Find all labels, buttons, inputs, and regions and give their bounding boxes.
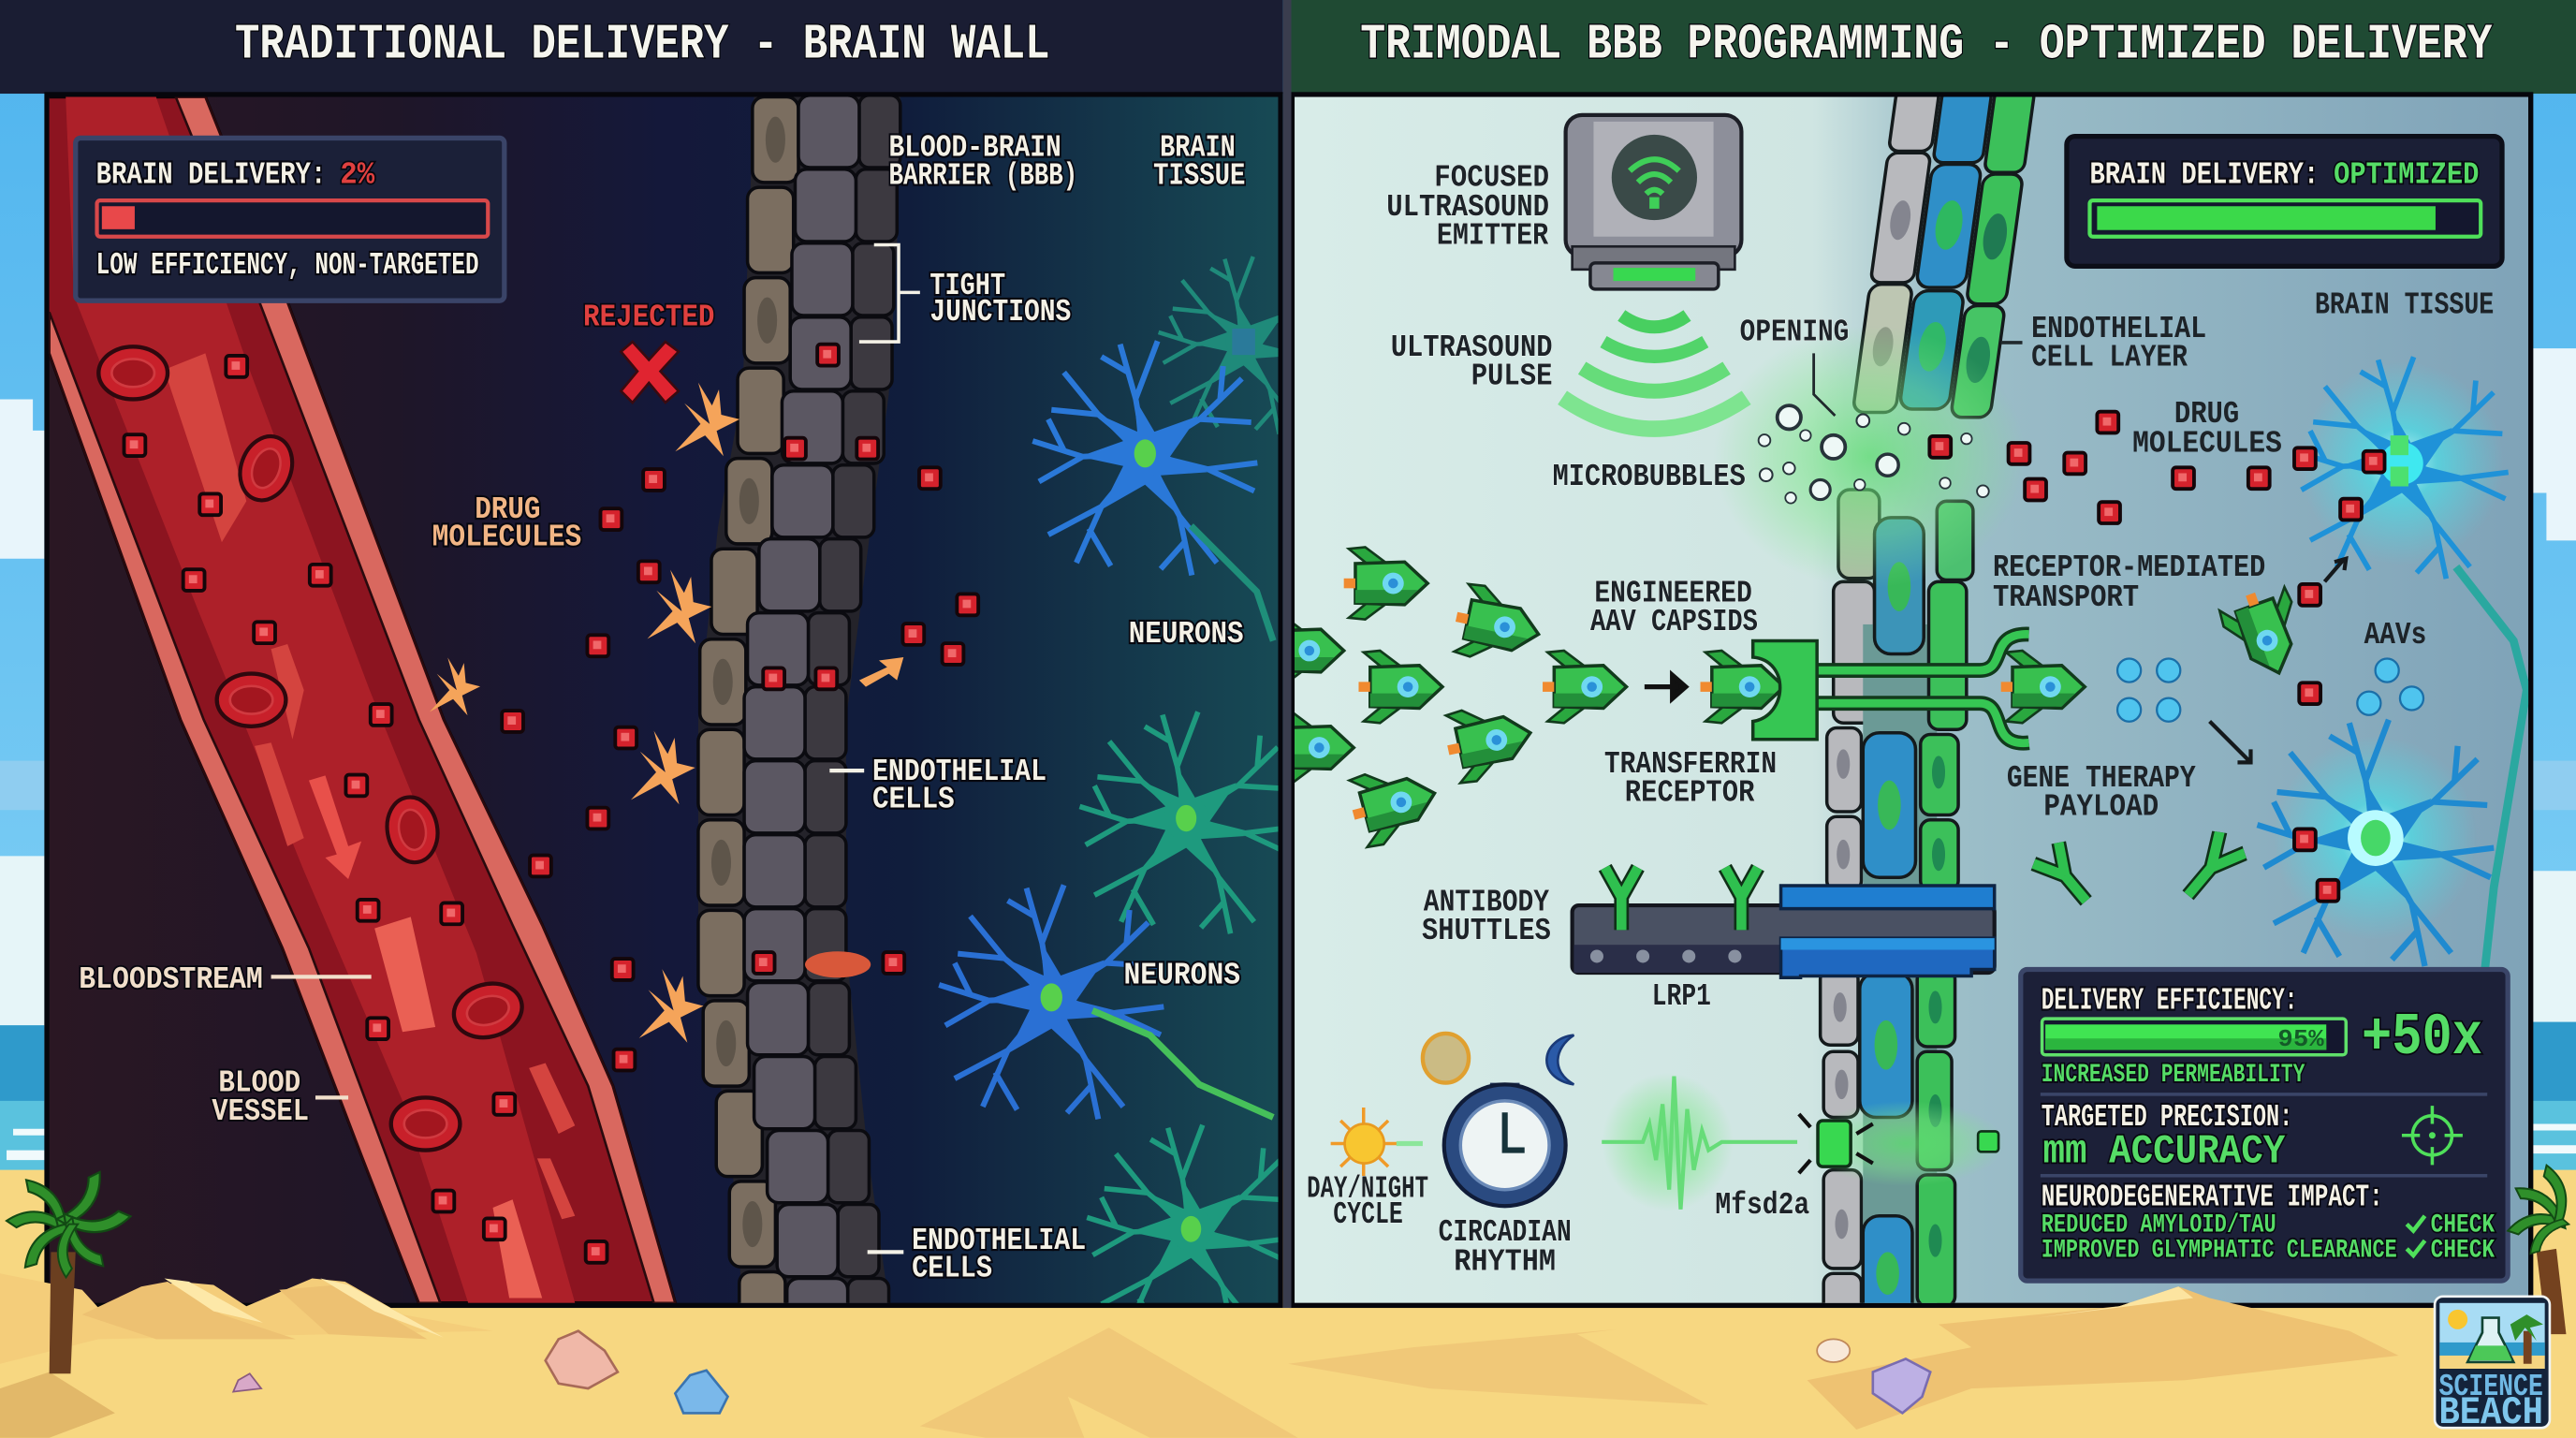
label: endothelial cell layer: CELL LAYER [2031,341,2188,376]
shell: lilac [1873,1358,1930,1413]
label: day/night cycle: DAY/NIGHT [1307,1172,1428,1208]
header: trimodal BBB programming [1292,0,2576,94]
label: transferrin receptor: RECEPTOR [1625,776,1754,812]
label: drug molecules [2132,397,2282,462]
stat box: delivery efficiency and impact: NEURODEGENERATIVE IMPACT: [2042,1180,2383,1215]
label: day/night cycle [1307,1172,1428,1233]
label: ultrasound pulse: ULTRASOUND [1391,330,1553,366]
label: circadian rhythm [1439,1215,1572,1281]
label: receptor-mediated transport [1993,550,2265,616]
efficiency bar: 95% [2277,1025,2324,1053]
icon: sun disc [1423,1034,1469,1083]
label: antibody shuttles [1422,885,1551,949]
label: bloodstream: BLOODSTREAM [79,962,263,998]
label: drug molecules: MOLECULES [432,521,581,556]
label: focused ultrasound emitter: ULTRASOUND [1386,190,1549,226]
upper endothelial cell layer [1852,89,2035,418]
background: sand [0,1170,2576,1438]
stat box: delivery efficiency and impact: INCREASED PERMEABILITY [2042,1061,2305,1090]
label: endothelial cell layer: ENDOTHELIAL [2031,312,2206,347]
Mfsd2a transporter node [1799,1101,2004,1186]
panel: trimodal BBB programming [1260,89,2533,1331]
label: transferrin receptor [1604,747,1777,812]
arrow toward receptor [1645,675,1686,698]
label: endothelial cell layer [2001,312,2206,376]
label: blood vessel [212,1065,348,1130]
label: ultrasound pulse [1391,330,1553,395]
endothelial wall of bricks [698,95,900,1357]
shell: pink scallop [546,1331,618,1388]
drug molecules [1929,412,2385,902]
red blood cells [98,346,528,1151]
stat box: delivery efficiency and impact: DELIVERY EFFICIENCY: [2042,984,2298,1020]
label: focused ultrasound emitter: EMITTER [1437,219,1548,255]
label: gene therapy payload: PAYLOAD [2043,790,2159,826]
label: receptor-mediated transport: TRANSPORT [1993,580,2139,616]
label: focused ultrasound emitter [1386,160,1549,255]
label: endothelial cells upper: CELLS [872,783,955,818]
stat box: brain delivery optimized: OPTIMIZED [2334,158,2479,194]
rejection bursts [430,383,903,1043]
neurons [938,256,1279,1303]
stat box: brain delivery 2%: 2% [340,158,375,194]
sand dunes [0,1273,2398,1438]
label: drug molecules: DRUG [475,492,540,528]
transferrin receptor [1753,634,2029,743]
label: antibody shuttles: ANTIBODY [1424,885,1549,920]
label: rejected: REJECTED [583,301,714,336]
opening glow [1728,330,2005,582]
circadian clock [1444,1083,1566,1206]
label: drug molecules: MOLECULES [2132,427,2282,462]
icon: rejected X [621,342,679,403]
label: brain tissue: BRAIN TISSUE [2315,287,2494,323]
stat box: delivery efficiency and impact: mm ACCURACY [2042,1129,2286,1176]
arrows on the right of the wall [2210,559,2346,762]
label: Mfsd2a: Mfsd2a [1715,1188,1809,1224]
panel: traditional delivery brain wall [33,92,1329,1357]
right palm tree [2506,1163,2574,1334]
engineered AAV capsids [1260,547,2313,850]
antibody shuttle conveyor LRP1 [1573,886,1995,977]
label: neurons upper: NEURONS [1129,617,1244,653]
label: antibody shuttles: SHUTTLES [1422,914,1551,949]
label: endothelial cells lower [868,1224,1086,1287]
neurons with cyan glow [2258,357,2526,977]
label: brain tissue [1153,131,1245,195]
logo: science beach: BEACH [2438,1390,2543,1435]
label: circadian rhythm: RHYTHM [1454,1245,1556,1281]
label: brain tissue: TISSUE [1153,159,1245,195]
stat box: delivery efficiency and impact: IMPROVED GLYMPHATIC CLEARANCE [2042,1237,2397,1266]
label: blood-brain barrier [889,131,1077,195]
stat box: delivery efficiency and impact: CHECK [2431,1211,2495,1240]
label: blood-brain barrier: BLOOD-BRAIN [889,131,1061,167]
divider between panels [1283,0,1292,1308]
header: traditional delivery: TRADITIONAL DELIVERY - BRAIN WALL [235,16,1050,72]
microbubbles [1759,405,1989,504]
stat box: brain delivery 2%: LOW EFFICIENCY, NON-TARGETED [96,248,479,284]
stat box: delivery efficiency and impact: CHECK [2431,1237,2495,1266]
label: microbubbles: MICROBUBBLES [1553,460,1746,495]
lower endothelial cell layer [1821,490,1973,1331]
shell: small purple [233,1373,261,1392]
AAV capsid payload dots [2117,659,2423,722]
label: focused ultrasound emitter: FOCUSED [1434,160,1549,196]
label: engineered AAV capsids: ENGINEERED [1594,576,1752,611]
logo: science beach: SCIENCE [2438,1370,2543,1405]
blood vessel [33,97,675,1303]
label: engineered AAV capsids: AAV CAPSIDS [1590,605,1758,640]
efficiency bar [2042,1019,2346,1055]
shell: blue [675,1371,728,1413]
label: AAVs: AAVs [2364,618,2426,653]
label: ultrasound pulse: PULSE [1471,360,1553,395]
stat box: brain delivery optimized: BRAIN DELIVERY: [2089,158,2319,194]
label: tight junctions with bracket: TIGHT [929,269,1005,304]
label: blood vessel: BLOOD [218,1065,300,1101]
label: day/night cycle: CYCLE [1333,1197,1403,1233]
label: tight junctions with bracket [859,245,1071,342]
label: LRP1: LRP1 [1652,979,1711,1015]
label: endothelial cells lower: ENDOTHELIAL [912,1224,1086,1259]
label: brain tissue: BRAIN [1160,131,1236,167]
label: circadian rhythm: CIRCADIAN [1439,1215,1572,1251]
left palm tree [7,1166,132,1373]
drug molecules [124,345,978,1263]
label: drug molecules [432,492,581,556]
label: engineered AAV capsids [1590,576,1758,640]
stat box: delivery efficiency and impact: TARGETED PRECISION: [2042,1100,2292,1136]
icon: ultrasound emitter [1566,115,1741,289]
label: blood-brain barrier: BARRIER (BBB) [889,159,1077,195]
label: opening: OPENING [1740,315,1849,350]
label: endothelial cells lower: CELLS [912,1252,992,1287]
label: gene therapy payload: GENE THERAPY [2007,761,2196,797]
stat box: delivery efficiency and impact: REDUCED AMYLOID/TAU [2042,1211,2276,1240]
stat box: brain delivery optimized [2067,137,2502,266]
icon: moon [1546,1035,1573,1084]
logo: science beach [2435,1297,2550,1435]
antibody Y shapes [1605,832,2245,930]
stat box: brain delivery 2%: BRAIN DELIVERY: [96,158,326,194]
label: transferrin receptor: TRANSFERRIN [1604,747,1777,783]
shell: small pink [1817,1339,1850,1362]
label: blood vessel: VESSEL [212,1094,309,1130]
opening pointer line [1814,353,1835,416]
label: drug molecules: DRUG [2174,397,2239,433]
label: tight junctions with bracket: JUNCTIONS [929,295,1071,330]
label: neurons lower: NEURONS [1123,958,1240,993]
icon: target crosshair [2402,1106,2463,1165]
label: gene therapy payload [2007,761,2196,826]
icon: sun day [1331,1108,1398,1177]
label: endothelial cells upper [829,755,1046,818]
label: endothelial cells upper: ENDOTHELIAL [872,755,1046,790]
stat box: delivery efficiency and impact [2021,970,2508,1281]
Mfsd2a waveform [1397,1073,1797,1211]
label: receptor-mediated transport: RECEPTOR-MEDIATED [1993,550,2265,586]
icon: check marks [2407,1216,2425,1255]
stat box: delivery efficiency and impact: +50x [2362,1004,2482,1071]
header: traditional delivery [0,0,1283,94]
ultrasound pulse waves [1562,315,1747,429]
stat box: brain delivery 2% [76,138,505,301]
